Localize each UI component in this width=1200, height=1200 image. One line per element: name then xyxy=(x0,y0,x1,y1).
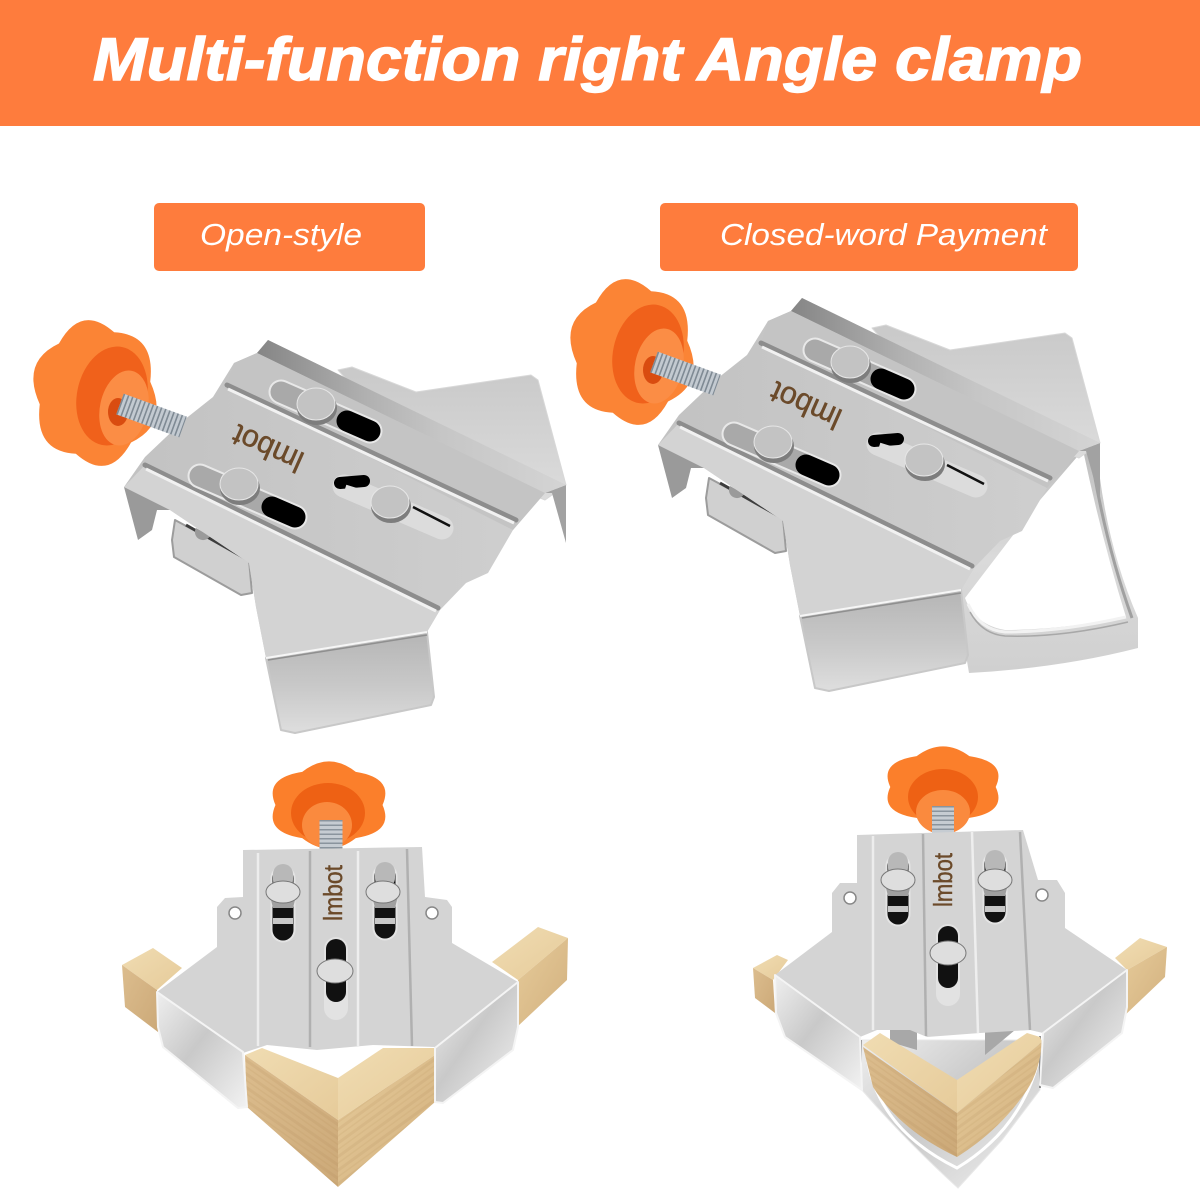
clamp: open-style perspective view xyxy=(15,304,566,733)
wood rear arms xyxy=(753,938,1167,1017)
threaded screw xyxy=(120,404,183,427)
clamp holding wood: open-style xyxy=(122,748,568,1187)
adjustment pins xyxy=(754,346,945,481)
label: closed-word payment xyxy=(660,203,1078,271)
plate grooves xyxy=(258,849,412,1047)
ear holes xyxy=(229,907,438,919)
threaded screw xyxy=(320,820,342,852)
title banner xyxy=(0,0,1200,126)
plate grooves xyxy=(873,832,1030,1036)
clamp body plate xyxy=(658,298,1100,691)
ear holes xyxy=(844,889,1048,904)
logo: lmbot xyxy=(765,374,847,436)
wood corner xyxy=(863,1033,1042,1157)
logo: lmbot xyxy=(928,852,958,907)
orange knob xyxy=(552,263,712,441)
pins xyxy=(266,881,400,983)
logo: lmbot xyxy=(227,417,309,479)
orange knob xyxy=(15,304,175,482)
title: Multi-function right Angle clamp xyxy=(93,26,1082,93)
closing handle frame xyxy=(955,442,1138,673)
flaps xyxy=(157,982,518,1108)
clamp plate xyxy=(775,830,1127,1037)
wood rear arms xyxy=(122,927,568,1032)
clamp body plate xyxy=(124,340,566,733)
flaps xyxy=(775,970,1127,1090)
lower closing cap xyxy=(861,1036,1042,1188)
label: open-style: Open-style xyxy=(200,217,362,252)
under-plate legs xyxy=(890,1030,1015,1055)
slots xyxy=(283,872,385,1008)
orange knob xyxy=(248,748,410,862)
adjustment pins xyxy=(220,388,411,523)
logo: lmbot xyxy=(318,864,348,921)
wood front corner xyxy=(245,1048,435,1187)
clamp plate xyxy=(157,847,518,1053)
pins xyxy=(881,869,1012,965)
threaded screw xyxy=(654,362,717,385)
clamp: closed-style perspective view xyxy=(552,263,1138,691)
clamp holding wood: closed-style xyxy=(753,734,1167,1188)
threaded screw xyxy=(932,806,954,836)
slots xyxy=(898,860,995,994)
label: open-style xyxy=(154,203,425,271)
label: closed-word payment: Closed-word Payment xyxy=(720,217,1048,252)
orange knob xyxy=(863,734,1023,840)
